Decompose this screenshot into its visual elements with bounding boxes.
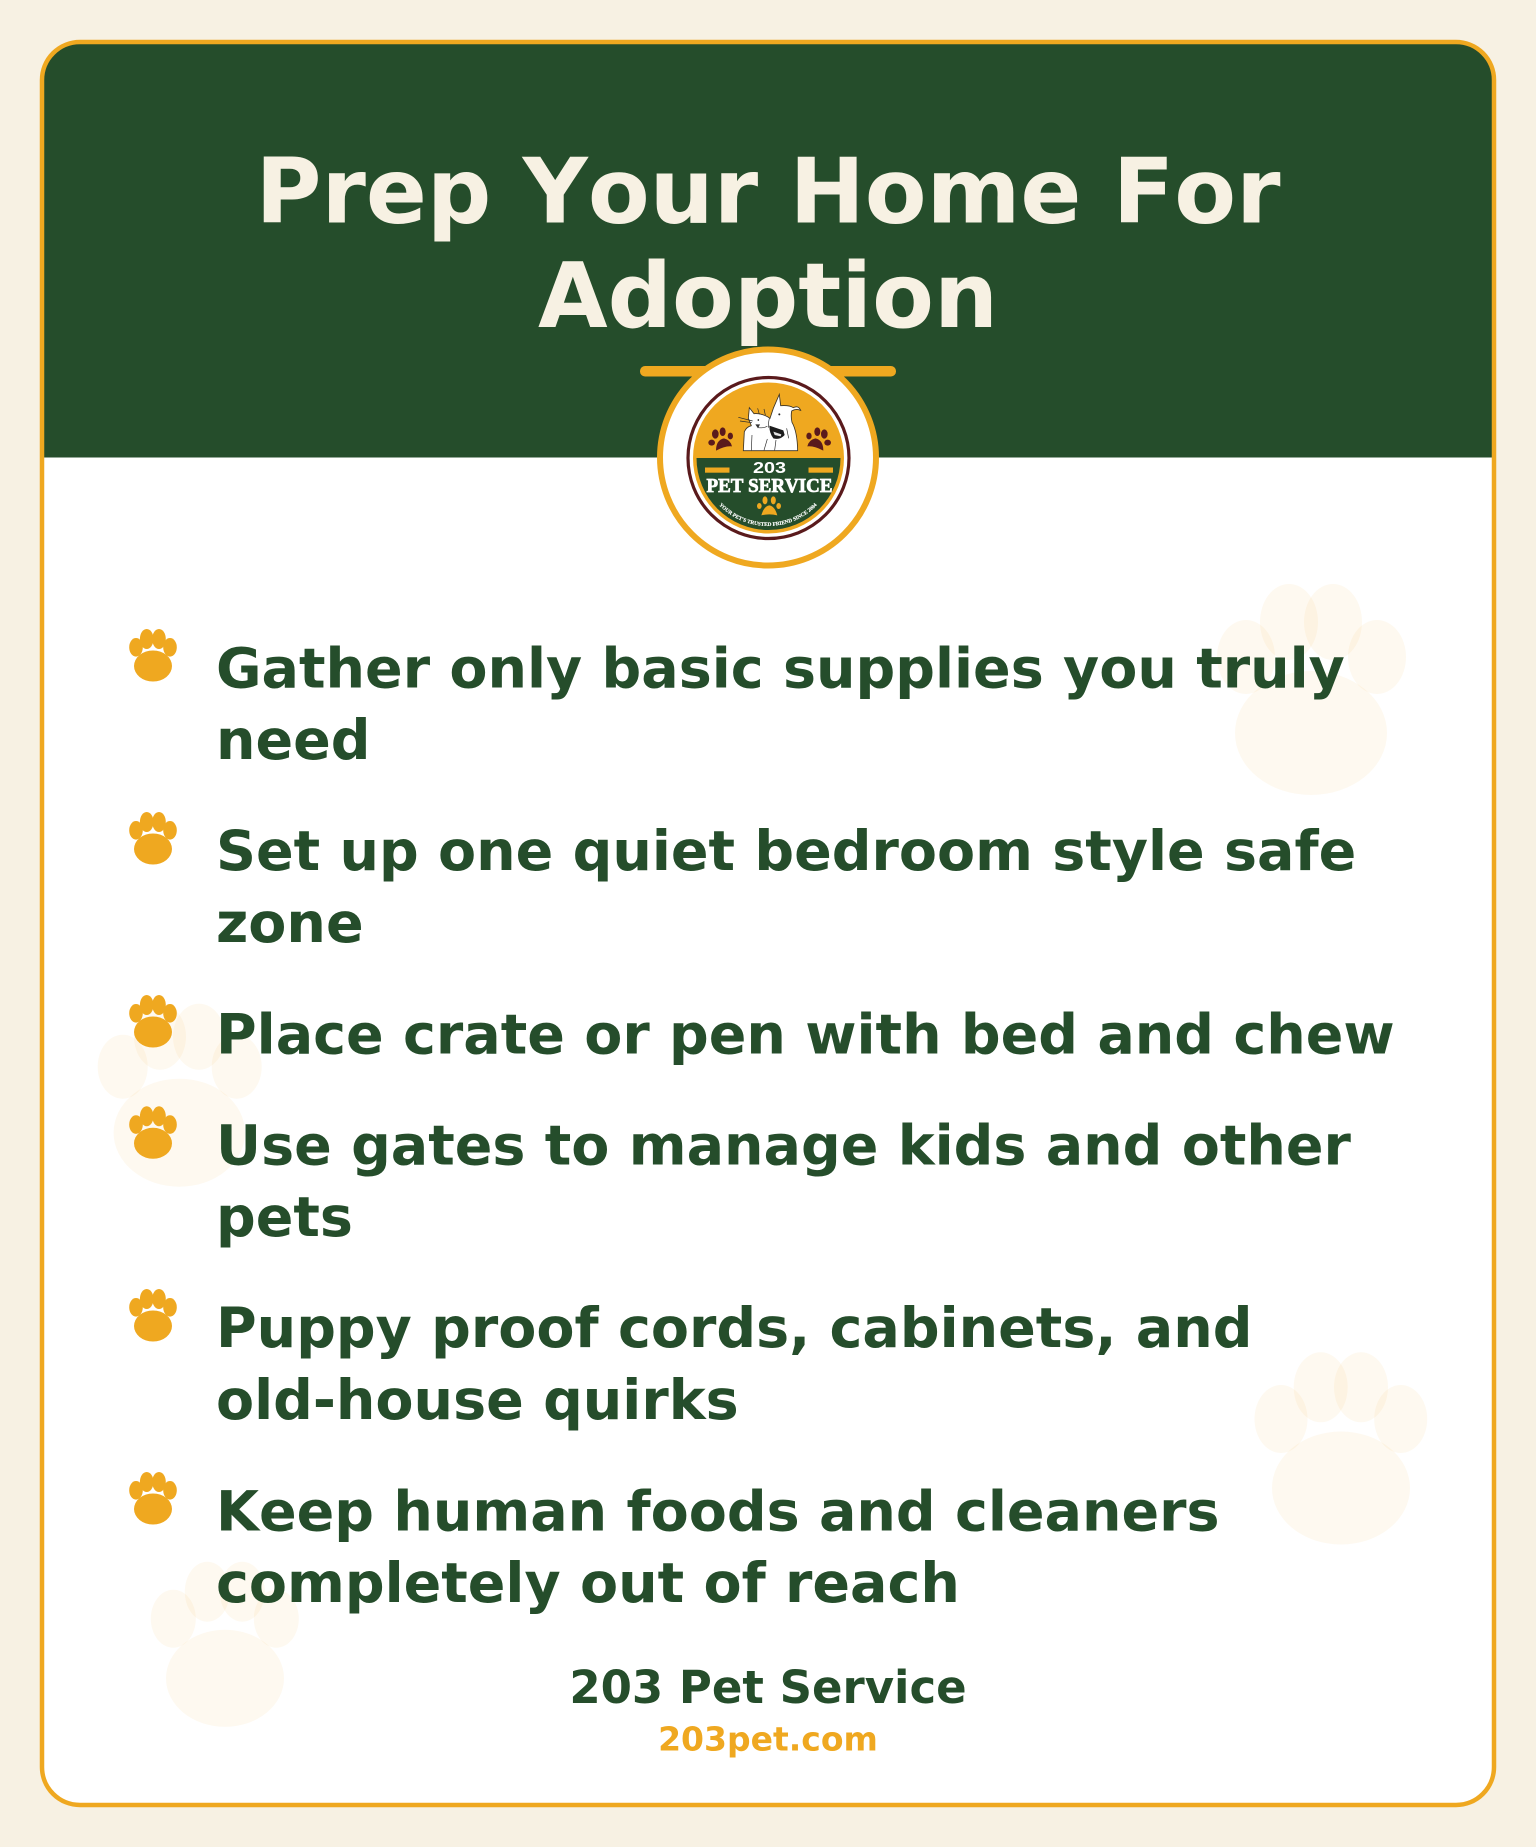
bullet paw 2: [129, 812, 177, 864]
bullet paw 3: [129, 995, 177, 1048]
bullet paw 4: [129, 1106, 177, 1159]
header band: [42, 42, 1494, 458]
bullet paw 5: [129, 1289, 177, 1342]
item 3 text: Place crate or pen with bed and chew: [216, 1002, 1395, 1068]
item 4 text: Use gates to manage kids and other: [216, 1114, 1352, 1178]
list: item 6: [129, 1472, 1220, 1616]
item 2 text: zone: [216, 891, 364, 956]
item 5 text: [216, 1296, 1252, 1433]
logo paw: right: [806, 427, 831, 451]
logo illustration: cat and dog: [738, 394, 801, 451]
item 1 text: need: [216, 708, 371, 773]
watermark paw: top right: [1217, 584, 1406, 795]
watermark paw: bottom left: [151, 1562, 299, 1727]
logo text: 203: 203: [753, 460, 786, 477]
list: item 4: [129, 1106, 1352, 1250]
bullet paw 6: [129, 1472, 177, 1524]
title: Prep Your Home For: [256, 140, 1281, 244]
item 2 text: [216, 819, 1356, 956]
logo bars: [705, 468, 833, 473]
title underline: [640, 366, 896, 376]
watermark paw: middle left: [98, 1004, 262, 1187]
list: item 1: [129, 629, 1345, 773]
list: item 5: [129, 1289, 1252, 1433]
item 4 text: pets: [216, 1185, 353, 1250]
list: item 2: [129, 812, 1356, 956]
item 6 text: [216, 1480, 1220, 1616]
footer: website: 203pet.com: [658, 1720, 878, 1759]
title: Adoption: [538, 244, 998, 349]
item 1 text: Gather only basic supplies you truly: [216, 636, 1345, 702]
logo paw: gold: [757, 496, 781, 515]
list: item 3: [129, 995, 1395, 1068]
item 1 text: [216, 636, 1345, 773]
item 2 text: Set up one quiet bedroom style safe: [216, 819, 1356, 884]
item 5 text: old-house quirks: [216, 1368, 739, 1433]
footer: brand name: 203 Pet Service: [569, 1661, 967, 1714]
logo paw: left: [708, 427, 733, 451]
title: [256, 140, 1281, 349]
item 6 text: completely out of reach: [216, 1551, 960, 1616]
item 6 text: Keep human foods and cleaners: [216, 1480, 1220, 1544]
logo text: pet service: PET SERVICE: [706, 475, 832, 497]
logo badge: [657, 346, 879, 568]
logo tagline: YOUR PET'S TRUSTED FRIEND SINCE 2004: [720, 502, 817, 526]
item 4 text: [216, 1114, 1352, 1250]
item 5 text: Puppy proof cords, cabinets, and: [216, 1296, 1252, 1361]
watermark paw: lower right: [1254, 1352, 1427, 1544]
bullet paw 1: [129, 629, 177, 682]
